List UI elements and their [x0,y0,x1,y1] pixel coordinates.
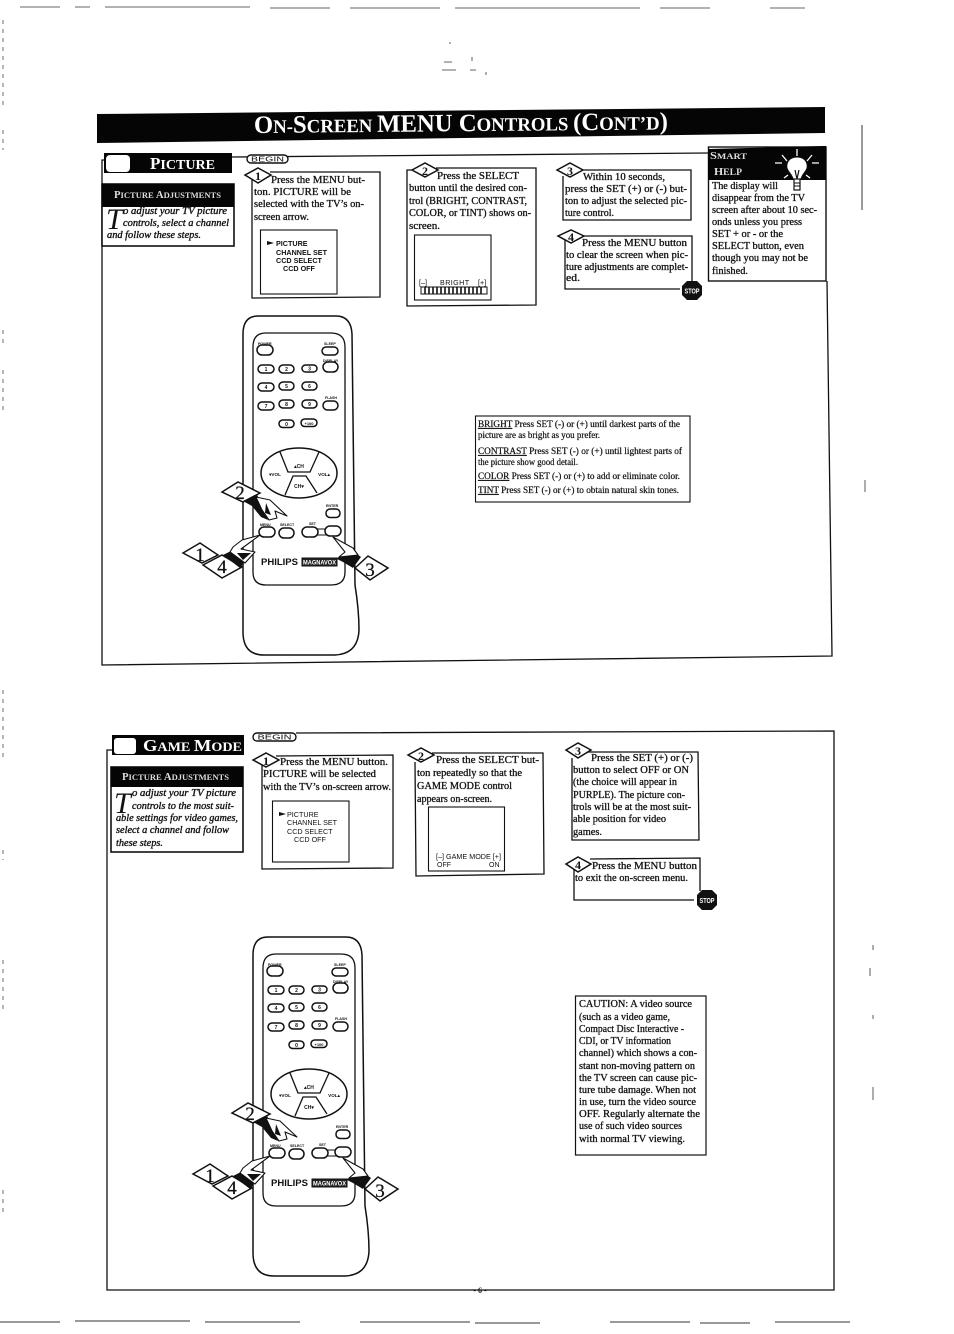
step 3: 3 [567,164,573,178]
smart help box: SELECT button, even [712,241,805,252]
step 2: appears on-screen. [417,794,492,805]
begin badge [247,155,288,164]
caution box: Compact Disc Interactive - [579,1024,685,1035]
illustration: remote control with step hands: DISPLAY [323,359,339,363]
step 4: to exit the on-screen menu. [575,873,688,884]
illustration: remote control with step hands: 2 [295,988,298,994]
picture adjustments intro box: PICTURE ADJUSTMENTS [122,772,230,783]
caution box: channel) which shows a con- [579,1048,698,1059]
begin badge: BEGIN [258,734,292,742]
step 4: 4 [575,858,581,872]
illustration: remote control with step hands [183,316,388,655]
picture control definitions: BRIGHT Press SET (-) or (+) until darkest parts of the [478,419,680,429]
picture control definitions: the picture show good detail. [478,457,578,467]
step 2: Press the SELECT but- [436,755,540,766]
title bar: ON-SCREEN MENU CONTROLS (CONT’D) [254,108,668,139]
step 4: 4 [568,230,574,244]
icon: stop sign: STOP [684,288,700,296]
picture heading: PICTURE [150,154,215,173]
picture control definitions: COLOR Press SET (-) or (+) to add or eliminate color. [478,471,680,481]
illustration: remote control with step hands: 3 [318,988,321,994]
step 4 [558,230,702,300]
begin badge [253,733,296,742]
smart help box: HELP [714,166,743,178]
picture adjustments intro box: able settings for video games, [116,813,238,824]
on-screen bright bar display: [+] [478,278,486,287]
smart help box: finished. [712,266,748,277]
on-screen menu display: CCD OFF [294,835,327,844]
step 2: screen. [409,221,440,232]
step 2: ton repeatedly so that the [417,768,522,779]
caution box: stant non-moving pattern on [579,1061,696,1072]
picture adjustments intro box [102,184,234,246]
picture control definitions [476,416,690,502]
smart help box: onds unless you press [712,217,802,228]
step 3: button to select OFF or ON [573,765,689,776]
illustration: remote control with step hands: MAGNAVOX [303,560,336,566]
step 2: Press the SELECT [437,171,520,182]
step 1: Press the MENU but- [271,175,366,186]
step 3: able position for video [573,814,666,825]
illustration: remote control with step hands: VOL▴ [318,472,331,477]
illustration: remote control with step hands: PHILIPS [261,557,298,568]
on-screen bright bar display [414,235,491,300]
picture adjustments intro box: T [106,203,125,236]
illustration: remote control with step hands: POWER [258,342,272,346]
step 2: button until the desired con- [409,183,528,194]
illustration: remote control with step hands: FLASH [325,396,337,400]
illustration: remote control with step hands: FLASH [335,1017,347,1021]
illustration: remote control with step hands: 8 [285,402,288,408]
step 4 [566,857,717,910]
caution box: ture tube damage. When not [579,1085,696,1096]
picture adjustments intro box: select a channel and follow [116,825,229,836]
step 4: Press the MENU button [592,861,698,872]
on-screen menu display: CCD SELECT [287,827,333,836]
illustration: remote control with step hands: SET [319,1143,327,1147]
step 3: PURPLE). The picture con- [573,790,686,801]
illustration: remote control with step hands: ENTER [336,1125,349,1129]
step 2: 2 [418,749,424,763]
step 1 [253,753,393,869]
panel: game mode section [107,731,834,1290]
illustration: remote control with step hands: 6 [318,1005,321,1011]
picture control definitions: CONTRAST Press SET (-) or (+) until lightest parts of [478,446,683,456]
illustration: remote control with step hands: MENU [270,1144,281,1148]
on-screen menu display [272,801,349,862]
step hand 1 and 4: 4 [217,557,227,578]
step 1: 1 [263,754,269,768]
step 4: ed. [566,273,580,284]
illustration: remote control with step hands: SELECT [290,1144,305,1148]
on-screen menu display: CCD SELECT [276,256,323,265]
step 4: ture adjustments are complet- [566,262,689,273]
illustration: remote control with step hands: CH▾ [294,484,304,490]
step 1: 1 [255,169,261,183]
caution box: in use, turn the video source [579,1097,696,1108]
step 3: ture control. [565,208,614,219]
caution box: the TV screen can cause pic- [579,1073,698,1084]
illustration: remote control with step hands: 1 [275,988,278,994]
on-screen bright bar display: BRIGHT [440,278,470,287]
illustration: remote control with step hands: MENU [260,523,271,527]
picture adjustments intro box: PICTURE ADJUSTMENTS [114,190,222,201]
illustration: remote control with step hands: +100 [304,421,314,426]
illustration: remote control with step hands: ▴CH [303,1085,314,1091]
icon: stop sign: STOP [700,898,715,905]
smart help box: disappear from the TV [712,193,805,204]
illustration: remote control with step hands: SET [309,522,317,526]
illustration: remote control with step hands: 9 [308,402,311,408]
caution box: OFF. Regularly alternate the [579,1109,700,1120]
step 3 [566,743,699,840]
on-screen menu display: CHANNEL SET [287,818,338,827]
illustration: remote control with step hands: 1 [265,367,268,373]
icon: light bulb [775,149,819,190]
begin badge: BEGIN [251,156,284,164]
picture adjustments intro box: controls to the most suit- [132,801,235,812]
picture adjustments intro box: T [114,787,133,820]
section frame [107,731,834,1290]
illustration: remote control with step hands: 0 [285,422,288,428]
illustration: remote control with step hands: ▾VOL [268,472,281,477]
page number: - 6 - [473,1286,487,1295]
step 3: press the SET (+) or (-) but- [565,184,688,195]
illustration: remote control with step hands: 0 [295,1043,298,1049]
step 2 [408,748,544,876]
illustration: remote control with step hands: ENTER [326,504,339,508]
illustration: remote control with step hands: ▴CH [293,464,304,470]
step 3 [557,163,691,220]
illustration: remote control with step hands: 6 [308,384,311,390]
on-screen menu display [260,230,337,294]
step 3: ton to adjust the selected pic- [565,196,688,207]
step hand 1 and 4: 1 [195,545,205,566]
illustration: remote control with step hands: 5 [285,384,288,390]
caution box: (such as a video game, [579,1012,670,1023]
caution box: CAUTION: A video source [579,999,692,1010]
caution box: with normal TV viewing. [579,1134,685,1145]
step 1: screen arrow. [254,212,309,223]
icon: stop sign [697,890,717,910]
panel: picture section [102,146,832,665]
on-screen menu display: PICTURE [287,810,319,819]
step 1 [245,168,380,298]
step 3: 3 [575,744,581,758]
illustration: remote control with step hands: POWER [268,963,282,967]
illustration: remote control with step hands: ▾VOL [278,1093,291,1098]
step hand 3: 3 [375,1181,385,1202]
step hand 2 [222,482,287,520]
illustration: remote control with step hands: 9 [318,1023,321,1029]
on-screen menu display: PICTURE [276,239,308,248]
step 3: Press the SET (+) or (-) [591,753,693,764]
illustration: remote control with step hands: 3 [308,366,311,372]
step 1: selected with the TV’s on- [254,199,365,210]
illustration: remote control with step hands: VOL▴ [328,1093,341,1098]
step hand 2: 2 [245,1104,255,1125]
picture adjustments intro box: these steps. [116,838,163,849]
caution box [576,996,706,1155]
step hand 2: 2 [235,483,245,504]
title bar [97,107,825,143]
illustration: remote control with step hands: SLEEP [334,963,346,967]
icon: stop sign [682,281,702,300]
step hand 1 and 4 [183,535,260,578]
caution box: CDI, or TV information [579,1036,672,1047]
frame top line [232,153,708,157]
step 2: trol (BRIGHT, CONTRAST, [409,196,527,207]
step 3: Within 10 seconds, [583,172,665,183]
illustration: remote control with step hands: 5 [295,1005,298,1011]
on-screen game mode display: [–] GAME MODE [+] [436,854,501,861]
illustration: remote control with step hands: 4 [275,1006,278,1012]
illustration: remote control with step hands: PHILIPS [271,1178,308,1189]
illustration: remote control with step hands: CH▾ [304,1105,314,1111]
step hand 1 and 4: 1 [205,1166,215,1187]
step 1: with the TV’s on-screen arrow. [263,782,391,793]
on-screen menu display: CHANNEL SET [276,248,328,257]
step 3: (the choice will appear in [573,777,678,788]
step 4: Press the MENU button [582,238,688,249]
caution box: use of such video sources [579,1121,682,1132]
step 1: ton. PICTURE will be [254,187,351,198]
step hand 2 [232,1103,297,1141]
game mode heading [112,735,244,755]
step hand 3 [343,1158,398,1202]
section frame [102,160,832,665]
illustration: remote control with step hands [193,937,398,1276]
smart help box: The display will [712,181,778,192]
picture control definitions: TINT Press SET (-) or (+) to obtain natural skin tones. [478,485,679,495]
on-screen game mode display [428,807,504,871]
picture adjustments intro box: o adjust your TV picture [123,206,227,217]
smart help box: though you may not be [712,253,808,264]
step 1: PICTURE will be selected [263,769,377,780]
picture heading [104,153,232,173]
illustration: remote control with step hands: SELECT [280,523,295,527]
picture adjustments intro box: controls, select a channel [123,218,229,229]
picture control definitions: picture are as bright as you prefer. [478,430,600,440]
illustration: remote control with step hands: DISPLAY [333,980,349,984]
on-screen game mode display: OFF [437,862,451,869]
illustration: remote control with step hands: 4 [265,385,268,391]
on-screen bright bar display: [–] [419,278,427,287]
on-screen menu display: CCD OFF [283,264,316,273]
step 2: COLOR, or TINT) shows on- [409,208,532,219]
game mode heading: GAME MODE [143,736,242,755]
illustration: remote control with step hands: SLEEP [324,342,336,346]
step 3: games. [573,827,602,838]
step 3: trols will be at the most suit- [573,802,692,813]
step hand 3 [333,537,388,581]
step 2 [407,163,536,306]
step 2: GAME MODE control [417,781,512,792]
illustration: remote control with step hands: +100 [314,1042,324,1047]
step hand 3: 3 [365,560,375,581]
smart help box: screen after about 10 sec- [712,205,818,216]
illustration: remote control with step hands: MAGNAVOX [313,1182,346,1188]
step 4: to clear the screen when pic- [566,250,689,261]
smart help box [708,146,826,281]
picture adjustments intro box: o adjust your TV picture [132,788,236,799]
picture adjustments intro box: and follow these steps. [107,230,201,241]
step 2: 2 [422,164,428,178]
step 1: Press the MENU button. [280,757,388,768]
smart help box: SMART [710,151,748,162]
on-screen game mode display: ON [489,862,500,869]
illustration: remote control with step hands: 8 [295,1023,298,1029]
picture adjustments intro box [111,767,243,852]
step hand 1 and 4 [193,1156,270,1199]
illustration: remote control with step hands: 7 [265,404,268,410]
step hand 1 and 4: 4 [227,1178,237,1199]
illustration: remote control with step hands: 2 [285,367,288,373]
illustration: remote control with step hands: 7 [275,1025,278,1031]
smart help box: SET + or - or the [712,229,783,240]
